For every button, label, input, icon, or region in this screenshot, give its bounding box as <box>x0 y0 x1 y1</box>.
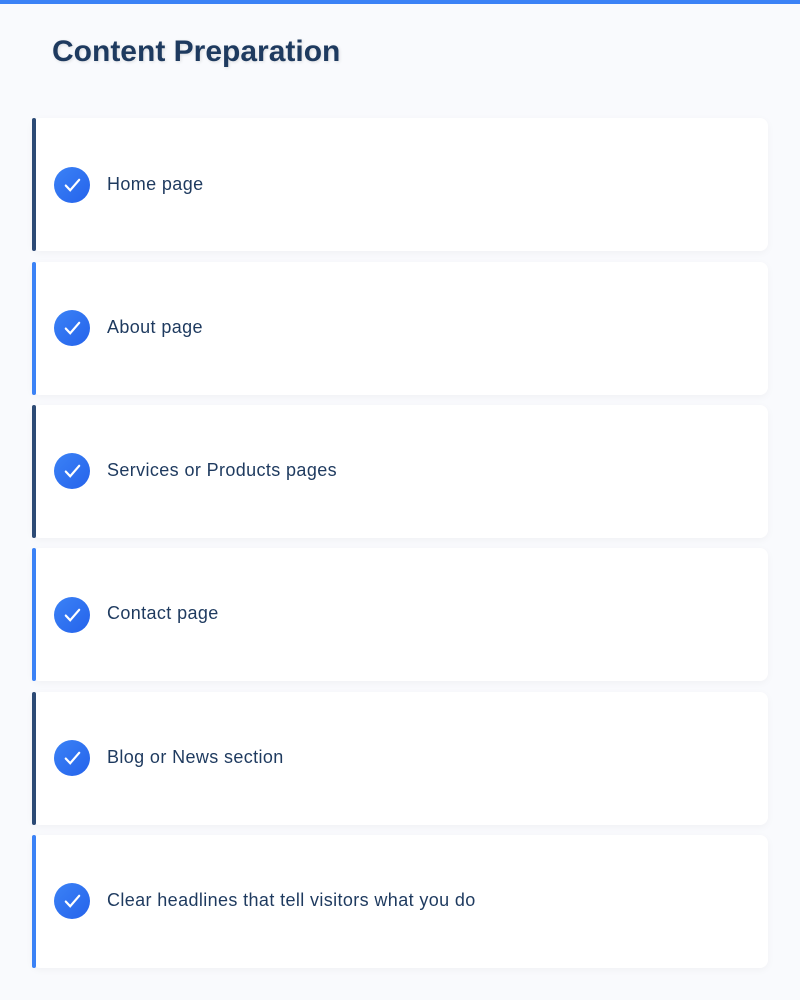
icon: check <box>54 883 90 919</box>
top accent bar <box>0 0 800 4</box>
label: Services or Products pages <box>107 460 337 480</box>
accent bar <box>32 405 36 538</box>
accent bar <box>32 118 36 251</box>
accent bar <box>32 835 36 968</box>
label: Clear headlines that tell visitors what you do <box>107 890 476 910</box>
panel: home page <box>32 118 768 251</box>
panel: contact page <box>32 548 768 681</box>
accent bar <box>32 548 36 681</box>
accent bar <box>32 262 36 395</box>
panel: services or products pages <box>32 405 768 538</box>
panel: clear headlines <box>32 835 768 968</box>
label: Blog or News section <box>107 747 284 767</box>
icon: check <box>54 740 90 776</box>
label: About page <box>107 317 203 337</box>
title: Content Preparation <box>52 35 340 68</box>
accent bar <box>32 692 36 825</box>
icon: check <box>54 453 90 489</box>
panel: about page <box>32 262 768 395</box>
icon: check <box>54 597 90 633</box>
label: Contact page <box>107 603 219 623</box>
icon: check <box>54 310 90 346</box>
icon: check <box>54 167 90 203</box>
panel: blog or news section <box>32 692 768 825</box>
label: Home page <box>107 174 203 194</box>
